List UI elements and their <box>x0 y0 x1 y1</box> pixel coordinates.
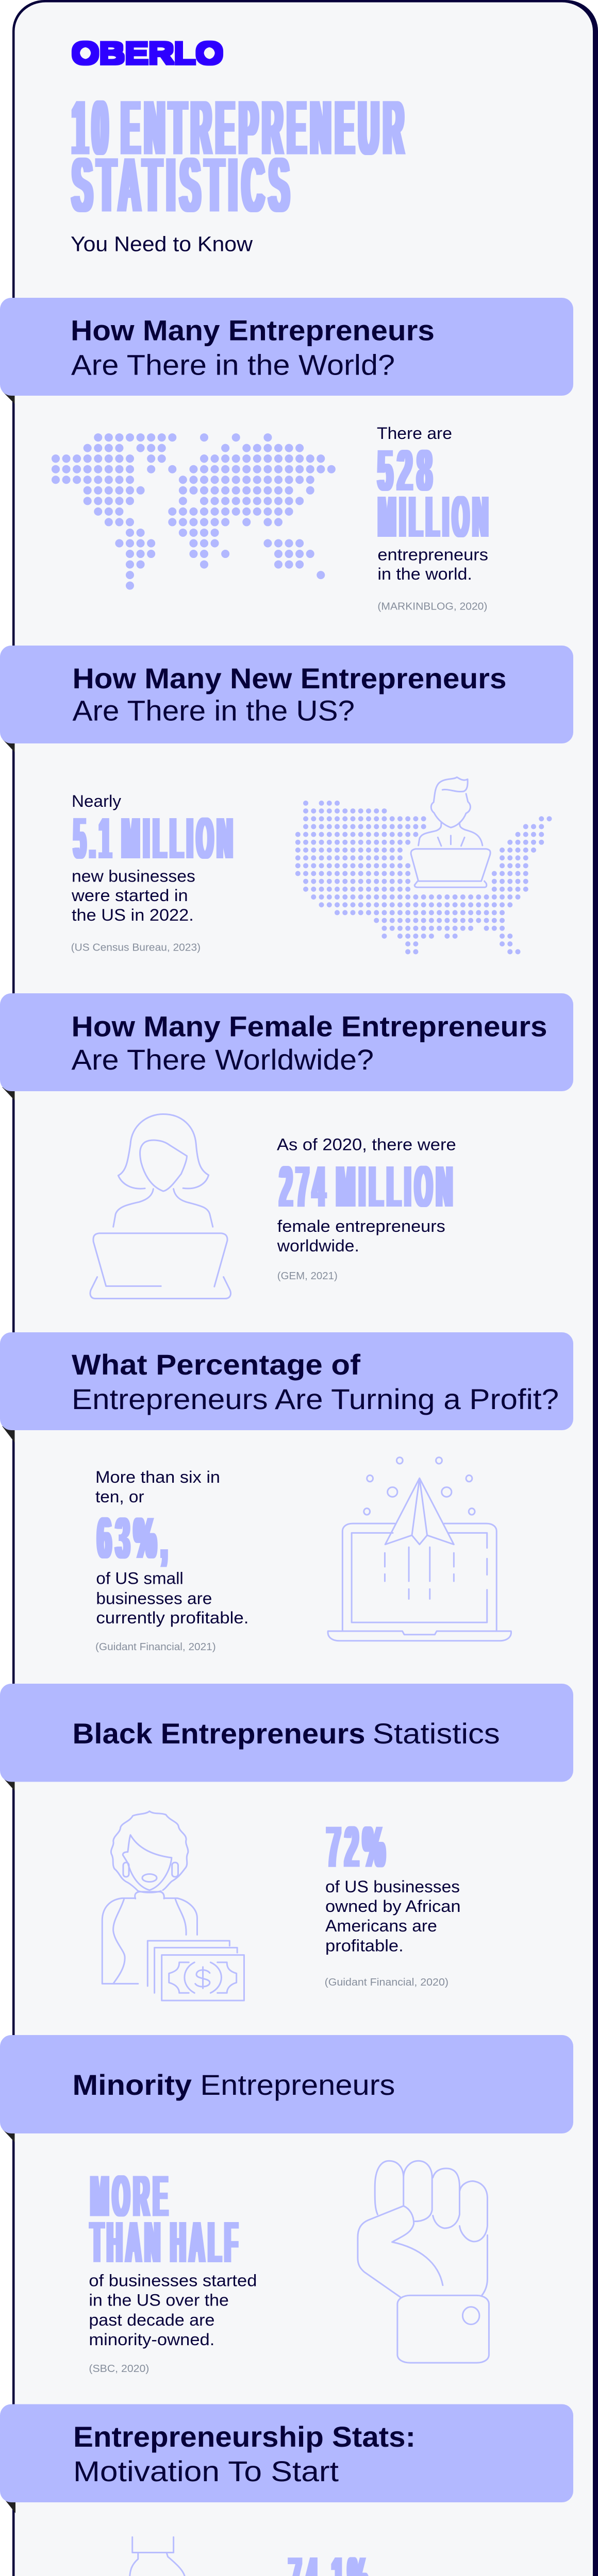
stat text: more than half <box>89 2164 257 2375</box>
stat text: 528 million: There are <box>377 424 452 443</box>
stat text: more than half: (SBC, 2020) <box>89 2363 149 2375</box>
panel: new entrepreneurs in the US: 5.1 MILLION <box>74 806 236 871</box>
icon: hand holding briefcase <box>92 2537 224 2576</box>
section header 6: Entrepreneurs <box>200 2069 395 2101</box>
panel: world entrepreneurs <box>0 298 573 612</box>
stat text: 63% <box>95 1468 248 1653</box>
icon: man at laptop <box>411 777 490 887</box>
section header 2 <box>0 646 573 752</box>
stat text: 63%: ten, or <box>95 1487 144 1506</box>
stat text: 5.1 million: (US Census Bureau, 2023) <box>71 942 201 953</box>
icon: woman with money <box>102 1811 244 2001</box>
stat text: 5.1 million: were started in <box>71 886 188 905</box>
stat text: 528 million: (MARKINBLOG, 2020) <box>377 601 487 612</box>
stat text: 5.1 million <box>71 792 236 953</box>
title <box>72 84 408 228</box>
section header 5: Black Entrepreneurs <box>72 1717 365 1750</box>
subtitle: You Need to Know <box>71 232 253 256</box>
panel: profit percentage <box>0 1332 573 1653</box>
stat text: 63%: currently profitable. <box>96 1608 248 1627</box>
section header 5: Statistics <box>373 1717 500 1750</box>
section header 5 <box>0 1684 573 1791</box>
section header 2: Are There in the US? <box>72 694 355 727</box>
section header 6 <box>0 2035 573 2142</box>
stat text: 63%: (Guidant Financial, 2021) <box>95 1641 216 1653</box>
panel: minority entrepreneurs: THAN HALF <box>91 2210 241 2275</box>
stat text: 72%: profitable. <box>325 1936 404 1955</box>
stat text: 274 million: (GEM, 2021) <box>277 1270 338 1282</box>
stat text: more than half: of businesses started <box>89 2271 257 2290</box>
section header 7: Motivation To Start <box>73 2455 339 2487</box>
stat text: more than half: MORE <box>91 2164 172 2229</box>
stat text: 528 million <box>377 424 492 612</box>
stat text: 63%: businesses are <box>96 1589 212 1607</box>
section header 1 <box>0 298 573 404</box>
icon: woman at laptop <box>90 1114 231 1299</box>
stat text: 528 million: in the world. <box>377 565 472 583</box>
section header 1: Are There in the World? <box>71 349 395 381</box>
section header 3: How Many Female Entrepreneurs <box>71 1010 547 1043</box>
section header 2: How Many New Entrepreneurs <box>72 662 506 694</box>
section header 4: Entrepreneurs Are Turning a Profit? <box>72 1383 559 1415</box>
section header 7: Entrepreneurship Stats: <box>73 2420 416 2453</box>
stat text: 63%: More than six in <box>95 1468 220 1486</box>
dotted world map <box>56 437 331 586</box>
stat text: 5.1 million: the US in 2022. <box>72 906 194 924</box>
stat text: 72% <box>325 1815 461 1988</box>
stat text: more than half: minority-owned. <box>89 2330 214 2349</box>
panel: minority entrepreneurs <box>0 2035 573 2375</box>
section header 6: Minority <box>72 2069 192 2101</box>
stat text: 5.1 million: new businesses <box>72 867 195 886</box>
stat text: 274 million <box>277 1136 456 1282</box>
stat text: 72%: 72% <box>327 1815 389 1879</box>
stat text: 72%: Americans are <box>325 1917 437 1935</box>
stat text: 63%: 63%, <box>97 1505 172 1570</box>
section header 4: What Percentage of <box>72 1348 360 1381</box>
stat text: 274 million: As of 2020, there were <box>277 1136 456 1154</box>
stat text: 5.1 million: Nearly <box>72 792 121 810</box>
section header 3 <box>0 993 573 1100</box>
stat text: 274 million: female entrepreneurs <box>277 1217 445 1235</box>
icon: raised fist <box>358 2161 489 2363</box>
dotted US map <box>298 803 550 952</box>
stat text: more than half: in the US over the <box>89 2291 229 2309</box>
logo: Oberlo: OBERLO <box>72 36 223 71</box>
stat text: 63%: of US small <box>96 1569 184 1588</box>
stat text: 72%: owned by African <box>325 1897 461 1916</box>
section header 4 <box>0 1332 573 1443</box>
stat text: 274 million: worldwide. <box>277 1236 359 1255</box>
panel: motivation to start <box>0 2404 573 2576</box>
stat text: 72%: (Guidant Financial, 2020) <box>325 1977 448 1988</box>
panel: new entrepreneurs in the US <box>0 646 573 953</box>
panel: female entrepreneurs <box>0 993 573 1299</box>
section header 3: Are There Worldwide? <box>71 1043 374 1076</box>
stat text: more than half: past decade are <box>89 2311 214 2329</box>
section header 1: How Many Entrepreneurs <box>71 314 435 347</box>
stat text: 528 million: 528 <box>378 438 437 503</box>
section header 7 <box>0 2404 573 2513</box>
panel: Black entrepreneurs <box>0 1684 573 2001</box>
icon: paper plane over laptop <box>328 1458 511 1641</box>
stat text: 528 million: entrepreneurs <box>377 545 488 564</box>
stat text: 72%: of US businesses <box>325 1877 460 1896</box>
